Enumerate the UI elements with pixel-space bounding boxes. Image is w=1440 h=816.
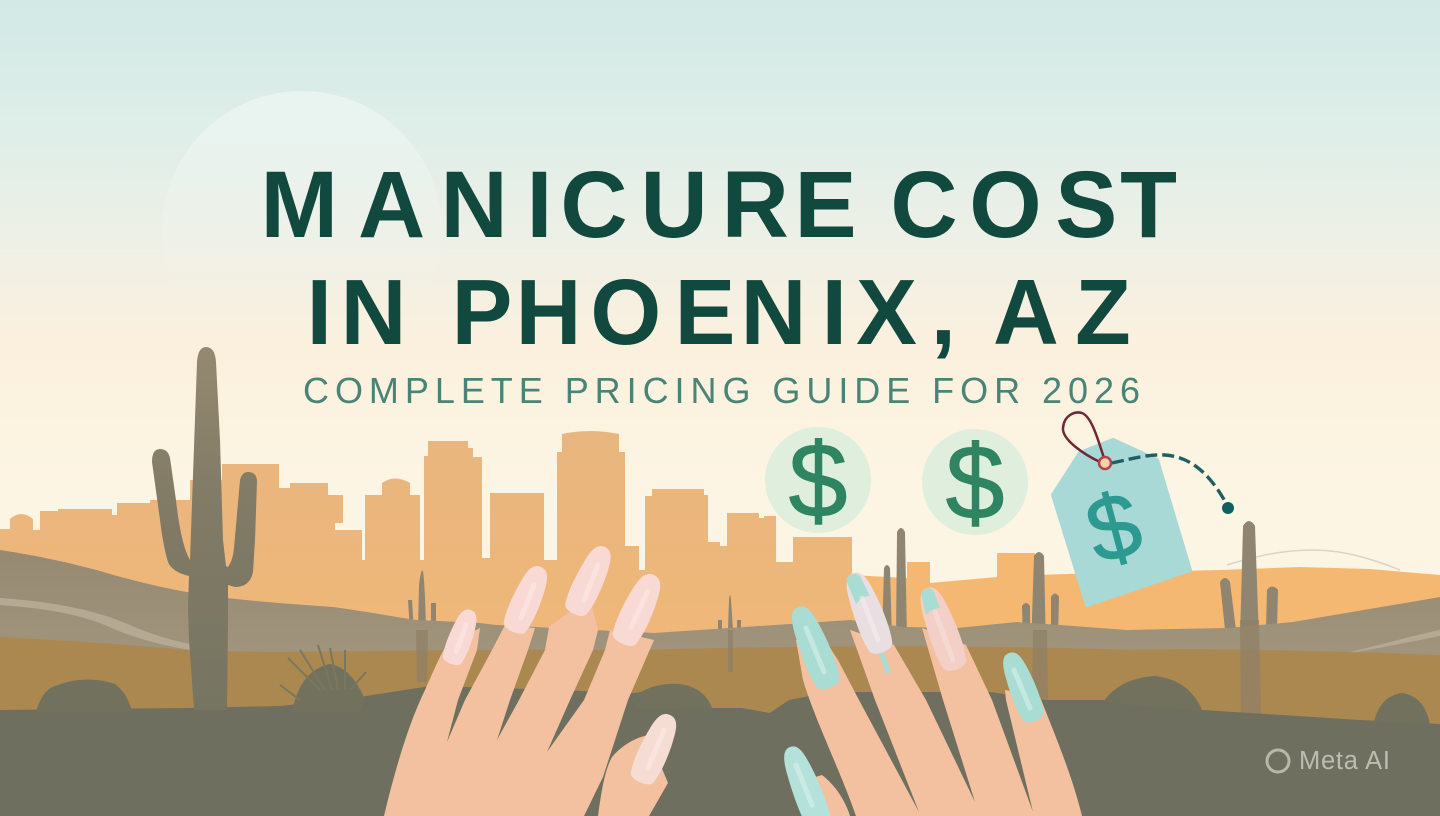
left hand nails <box>440 541 684 788</box>
orange desert dune <box>852 553 1440 680</box>
desert shrubs <box>36 664 1430 724</box>
subtitle: COMPLETE PRICING GUIDE FOR 2026 <box>303 370 1140 411</box>
tag dollar sign: $ <box>1076 472 1152 584</box>
right hand <box>777 568 1082 816</box>
spiky agave leaves <box>280 645 366 700</box>
price tag <box>1053 413 1234 605</box>
right hand nails <box>777 568 1047 816</box>
grey mid-ground hills <box>0 550 1440 720</box>
left thumb <box>598 735 668 816</box>
dollar coin one <box>765 422 871 540</box>
distant hill line <box>1227 550 1400 570</box>
tag string loop <box>1063 413 1104 462</box>
right hand palm and fingers <box>796 628 1082 816</box>
tag eyelet <box>1099 457 1111 469</box>
dashed string with end dot <box>1112 455 1226 503</box>
distant cacti behind hills <box>408 521 1278 650</box>
right thumb <box>812 775 850 816</box>
left nail highlights <box>456 565 664 768</box>
tag body <box>1053 440 1190 605</box>
dollar coin two: $ <box>946 424 1004 542</box>
faded lower cactus trunks <box>416 620 1261 714</box>
tan sand band <box>0 637 1440 735</box>
dollar coin two <box>922 424 1028 542</box>
left hand palm and fingers <box>384 606 654 816</box>
title line one: MANICURE COST <box>260 151 1177 257</box>
title line two: IN PHOENIX, AZ <box>307 260 1131 364</box>
large saguaro cactus <box>152 347 257 710</box>
dollar coin one: $ <box>789 422 847 540</box>
pale sun disc <box>162 91 442 371</box>
right nail highlights <box>796 598 1030 805</box>
left hand <box>384 541 684 816</box>
meta ai watermark: Meta AI <box>1299 747 1390 775</box>
dark foreground ground <box>0 686 1440 816</box>
hill highlight strokes <box>0 598 1440 655</box>
phoenix skyline silhouette <box>0 431 852 640</box>
title <box>260 151 1177 364</box>
